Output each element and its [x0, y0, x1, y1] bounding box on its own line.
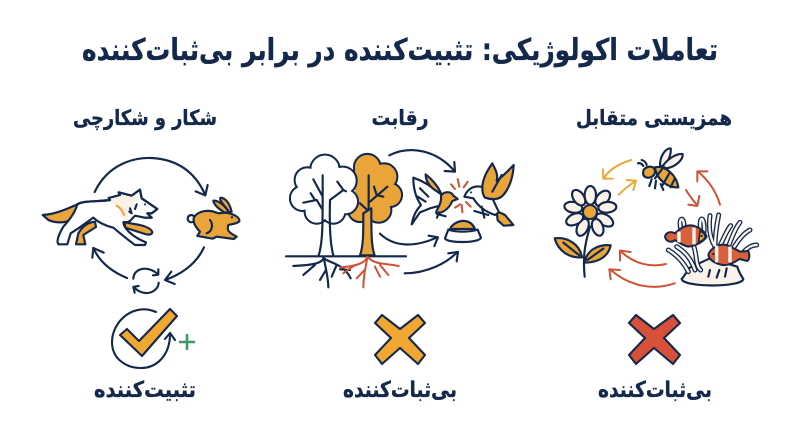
- diagram: competition: [286, 150, 458, 287]
- icon: orange tree: [348, 154, 402, 255]
- heading: predator and prey: شکار و شکارچی: [73, 106, 217, 130]
- arrow: roots to food: [405, 252, 458, 273]
- icon: anemone with clownfish: [665, 215, 757, 285]
- icon: red roots: [341, 257, 399, 287]
- panel: mutualism: [555, 106, 757, 403]
- anemone tentacles: [668, 215, 757, 272]
- panel: competition: [286, 106, 514, 403]
- icon: clownfish top: [665, 225, 707, 247]
- icon: left bird: [412, 174, 458, 224]
- diagram: predator prey cycle: [43, 158, 239, 293]
- icon: wolf: [43, 190, 157, 245]
- icon: orange cross: [375, 315, 425, 364]
- birds and bowl: [412, 163, 514, 242]
- anemone base: [682, 258, 743, 285]
- arrow: rabbit to cycle: [165, 247, 204, 284]
- arrow: tree to food: [380, 234, 438, 246]
- icon: bee: [638, 148, 683, 190]
- icon: red cross: [629, 315, 680, 364]
- label: destabilizing: بی‌ثبات‌کننده: [598, 378, 712, 403]
- icon: white tree: [290, 155, 358, 255]
- arrow: wolf to rabbit: [95, 158, 208, 195]
- icon: stabilizing check: [112, 309, 195, 368]
- icon: food bowl: [445, 221, 481, 242]
- diagram: mutualism: [555, 148, 757, 287]
- icon: conflict sparks: [451, 179, 471, 212]
- heading: competition: رقابت: [372, 106, 428, 130]
- arrows: anemone to flower: [609, 251, 675, 287]
- icon: rabbit: [188, 198, 239, 239]
- icon: clownfish bottom: [708, 245, 749, 265]
- ground line: [286, 253, 406, 260]
- icon: right bird: [464, 163, 514, 226]
- arrows and rabbit: [92, 158, 239, 293]
- label: destabilizing: بی‌ثبات‌کننده: [343, 378, 457, 403]
- icon: small cycle: [133, 269, 159, 293]
- heading: mutualism: همزیستی متقابل: [576, 106, 732, 130]
- icon: flower: [555, 186, 617, 277]
- arrow: tree to birds: [389, 150, 455, 172]
- icon: navy roots: [293, 257, 351, 287]
- label: stabilizing: تثبیت‌کننده: [94, 378, 196, 403]
- arrows: bee and anemone: [686, 171, 720, 206]
- arrows: bee and flower: [603, 160, 636, 195]
- panel: predator and prey: [43, 106, 239, 403]
- arrow: cycle to wolf: [92, 248, 127, 278]
